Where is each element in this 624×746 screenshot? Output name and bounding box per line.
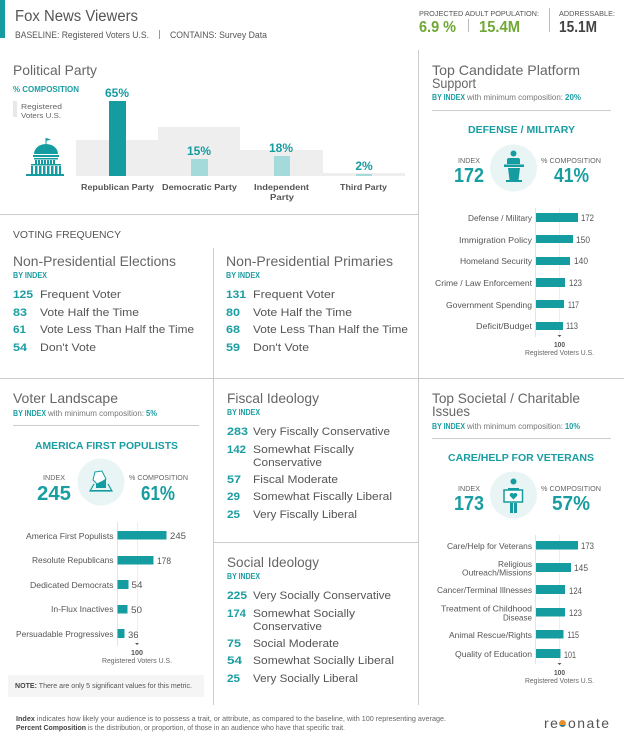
bar chart: voter segments: In-Flux Inactives [51, 604, 114, 614]
baseline: BASELINE: Registered Voters U.S. [15, 30, 149, 40]
composition stat [129, 473, 188, 505]
index list: Vote Less Than Half the Time [40, 324, 194, 336]
index list: Vote Half the Time [40, 307, 139, 319]
addressable count: 15.1M [559, 19, 597, 36]
population percent: 6.9 % [419, 19, 456, 36]
bar chart: voter segments: 178 [157, 556, 171, 567]
bar chart: societal issues: Care/Help for Veterans [447, 541, 532, 551]
sublabel: BY INDEX [227, 572, 261, 581]
heading: Non-Presidential Elections [13, 253, 176, 269]
panel: non-presidential primaries [226, 253, 408, 354]
index list: 75 [227, 638, 241, 650]
index list: 29 [227, 491, 240, 503]
heading: Top Societal / Charitable [432, 390, 580, 406]
sublabel: with minimum composition: [466, 93, 563, 102]
bar chart: platform index: Registered Voters U.S. [525, 348, 594, 357]
top item name: DEFENSE / MILITARY [468, 124, 575, 136]
index list: Somewhat Socially Liberal [253, 655, 394, 667]
bar chart: political party: 15% [187, 144, 211, 158]
bar chart: voter segments: Dedicated Democrats [30, 580, 114, 590]
population label: PROJECTED ADULT POPULATION: [419, 9, 539, 18]
audience stats [419, 8, 615, 36]
bar chart: societal issues: 115 [568, 630, 579, 641]
index list: 25 [227, 509, 240, 521]
composition stat: 57% [552, 493, 590, 515]
index stat [37, 473, 71, 505]
heading: Social Ideology [227, 554, 319, 570]
note: NOTE: There are only 5 significant values for this metric. [15, 683, 192, 690]
legend: Registered [21, 102, 62, 111]
bar chart: societal issues: Registered Voters U.S. [525, 676, 594, 685]
population count: 15.4M [479, 19, 520, 36]
bar chart: platform index: Immigration Policy [459, 235, 533, 245]
bar chart: political party: 65% [105, 86, 129, 100]
index list: 80 [226, 307, 240, 319]
index list: Somewhat Socially [253, 608, 356, 620]
bar chart: societal issues: Treatment of Childhood [441, 604, 532, 614]
index list: 57 [227, 474, 241, 486]
bar chart: political party: Democratic Party [162, 183, 238, 192]
index list: 54 [227, 655, 243, 667]
index list: Somewhat Fiscally Liberal [253, 491, 392, 503]
bar chart: societal issues: 124 [569, 586, 582, 597]
index definition: Index indicates how likely your audience is to possess a trait, or attribute, as compared to the baseline, with 100 representing average. [16, 714, 446, 723]
index stat: INDEX [43, 473, 65, 482]
composition stat: 61% [141, 483, 175, 505]
bar chart: platform index: Crime / Law Enforcement [435, 278, 533, 288]
index stat: INDEX [458, 484, 480, 493]
bar chart: platform index: 123 [569, 278, 582, 289]
bar chart: voter segments: 100 [131, 650, 143, 657]
index list: 283 [227, 426, 248, 438]
panel: social ideology [227, 554, 394, 685]
bar chart: societal issues [437, 535, 594, 685]
index list: 142 [227, 444, 246, 456]
title: Fox News Viewers [15, 8, 138, 25]
index list [227, 590, 394, 685]
composition stat [541, 484, 601, 515]
index list: Frequent Voter [40, 289, 121, 301]
sublabel: with minimum composition: [466, 422, 563, 431]
header [0, 0, 267, 40]
index list: Vote Less Than Half the Time [253, 324, 408, 336]
bar chart: societal issues: Outreach/Missions [462, 568, 532, 578]
bar chart: political party: Third Party [340, 183, 388, 192]
sublabel [13, 409, 157, 418]
index stat [454, 484, 484, 515]
icon: capitol building [26, 138, 64, 176]
index stat: 173 [454, 493, 484, 515]
index list: 68 [226, 324, 240, 336]
bar chart: platform index [435, 208, 594, 357]
bar chart: political party: Independent [254, 183, 309, 192]
top item name: CARE/HELP FOR VETERANS [448, 452, 594, 464]
bar chart: societal issues: 173 [581, 541, 594, 552]
bar chart: platform index: 172 [581, 213, 594, 224]
top item name: AMERICA FIRST POPULISTS [35, 440, 178, 452]
composition stat [541, 156, 601, 187]
panel: political party [13, 62, 405, 202]
sublabel: BY INDEX [432, 93, 466, 102]
legend: Voters U.S. [21, 111, 61, 120]
icon: podium speaker [490, 144, 537, 192]
bar chart: societal issues: 145 [574, 563, 588, 574]
index list: 131 [226, 289, 246, 301]
index list: 61 [13, 324, 26, 336]
sublabel: BY INDEX [13, 409, 47, 418]
index list: Conservative [253, 457, 322, 469]
sublabel: 10% [565, 422, 580, 431]
panel: top candidate platform support [432, 62, 611, 357]
composition stat: 41% [554, 165, 589, 187]
heading: Political Party [13, 62, 97, 78]
index list: Vote Half the Time [253, 307, 352, 319]
index stat: 245 [37, 483, 71, 505]
bar chart: platform index: 140 [574, 256, 588, 267]
bar chart: platform index: Homeland Security [460, 256, 533, 266]
index stat: 172 [454, 165, 484, 187]
index list [227, 426, 392, 521]
bar chart: societal issues: Religious [498, 559, 532, 569]
bar chart: platform index: 150 [576, 235, 590, 246]
footer definitions [16, 714, 446, 732]
panel: fiscal ideology [227, 390, 392, 521]
bar chart: voter segments: 50 [131, 605, 142, 616]
bar chart: platform index: Government Spending [446, 300, 532, 310]
panel: top candidate platform support: Support [432, 75, 476, 91]
sublabel: BY INDEX [432, 422, 466, 431]
note [8, 675, 204, 697]
bar chart: platform index: 113 [566, 321, 578, 332]
index stat [454, 156, 484, 187]
index list: 25 [227, 673, 240, 685]
bar chart: platform index: Deficit/Budget [476, 321, 533, 331]
composition stat: % COMPOSITION [541, 484, 601, 493]
bar chart: voter segments: America First Populists [26, 531, 114, 541]
bar chart: societal issues: Cancer/Terminal Illnesses [437, 585, 532, 595]
bar chart: platform index: 100 [554, 342, 565, 349]
bar chart: societal issues: Quality of Education [455, 649, 532, 659]
index list: Very Socially Conservative [253, 590, 391, 602]
accent bar [0, 0, 5, 38]
sublabel [432, 93, 581, 102]
panel: top societal charitable issues: Issues [432, 403, 470, 419]
logo: resonate: resonate [544, 715, 609, 731]
contains: CONTAINS: Survey Data [170, 30, 267, 40]
sublabel: 20% [565, 93, 581, 102]
index list: Very Fiscally Liberal [253, 509, 357, 521]
bar chart: societal issues: Animal Rescue/Rights [449, 630, 532, 640]
bar chart: political party [76, 86, 405, 202]
composition stat: % COMPOSITION [541, 156, 601, 165]
legend [13, 101, 62, 120]
bar chart: political party: Party [270, 193, 295, 202]
index list: 59 [226, 342, 240, 354]
panel: non-presidential elections [13, 253, 194, 354]
sublabel: BY INDEX [227, 408, 261, 417]
icon: ballot box [78, 458, 124, 506]
index list: 125 [13, 289, 33, 301]
bar chart: societal issues: 100 [554, 670, 565, 677]
composition stat: % COMPOSITION [129, 473, 188, 482]
index list [226, 289, 408, 354]
bar chart: platform index: 117 [568, 300, 579, 311]
sublabel: BY INDEX [13, 271, 48, 280]
heading: voting frequency: VOTING FREQUENCY [13, 229, 121, 241]
index list: 225 [227, 590, 247, 602]
sublabel: with minimum composition: [47, 409, 144, 418]
heading: Non-Presidential Primaries [226, 253, 393, 269]
index list: Don't Vote [253, 342, 309, 354]
index list: Don't Vote [40, 342, 96, 354]
addressable label: ADDRESSABLE: [559, 9, 615, 18]
index list [13, 289, 194, 354]
bar chart: voter segments: 245 [170, 531, 186, 542]
bar chart: voter segments: 36 [128, 630, 138, 641]
bar chart: platform index: Defense / Military [468, 213, 533, 223]
panel: voter landscape [8, 390, 204, 697]
bar chart: voter segments: Resolute Republicans [32, 555, 114, 565]
bar chart: political party: Republican Party [81, 183, 155, 192]
composition definition: Percent Composition is the distribution, or proportion, of those in an audience who have that specific trait. [16, 723, 345, 732]
bar chart: voter segments: 54 [132, 580, 142, 591]
sublabel [432, 422, 580, 431]
index list: Fiscal Moderate [253, 474, 338, 486]
index list: Conservative [253, 621, 322, 633]
legend label: % COMPOSITION [13, 85, 79, 94]
panel: top societal charitable issues [432, 390, 611, 685]
heading: Voter Landscape [13, 390, 118, 406]
index list: Somewhat Fiscally [253, 444, 355, 456]
index list: Frequent Voter [253, 289, 335, 301]
heading: Fiscal Ideology [227, 390, 319, 406]
sublabel: 5% [146, 409, 157, 418]
index list: Very Socially Liberal [253, 673, 358, 685]
bar chart: political party: 18% [269, 141, 293, 155]
bar chart: voter segments [16, 522, 186, 665]
bar chart: societal issues: Disease [503, 612, 532, 622]
bar chart: political party: 2% [355, 159, 373, 173]
sublabel: BY INDEX [226, 271, 261, 280]
bar chart: societal issues: 123 [569, 608, 582, 619]
bar chart: voter segments: Registered Voters U.S. [102, 656, 172, 665]
bar chart: societal issues: 101 [564, 650, 576, 661]
index list: 174 [227, 608, 247, 620]
bar chart: voter segments: Persuadable Progressives [16, 629, 114, 639]
index stat: INDEX [458, 156, 480, 165]
icon: person holding heart sign [490, 472, 537, 518]
index list: Social Moderate [253, 638, 339, 650]
index list: 83 [13, 307, 27, 319]
index list: 54 [13, 342, 28, 354]
heading: Top Candidate Platform [432, 62, 580, 78]
index list: Very Fiscally Conservative [253, 426, 390, 438]
